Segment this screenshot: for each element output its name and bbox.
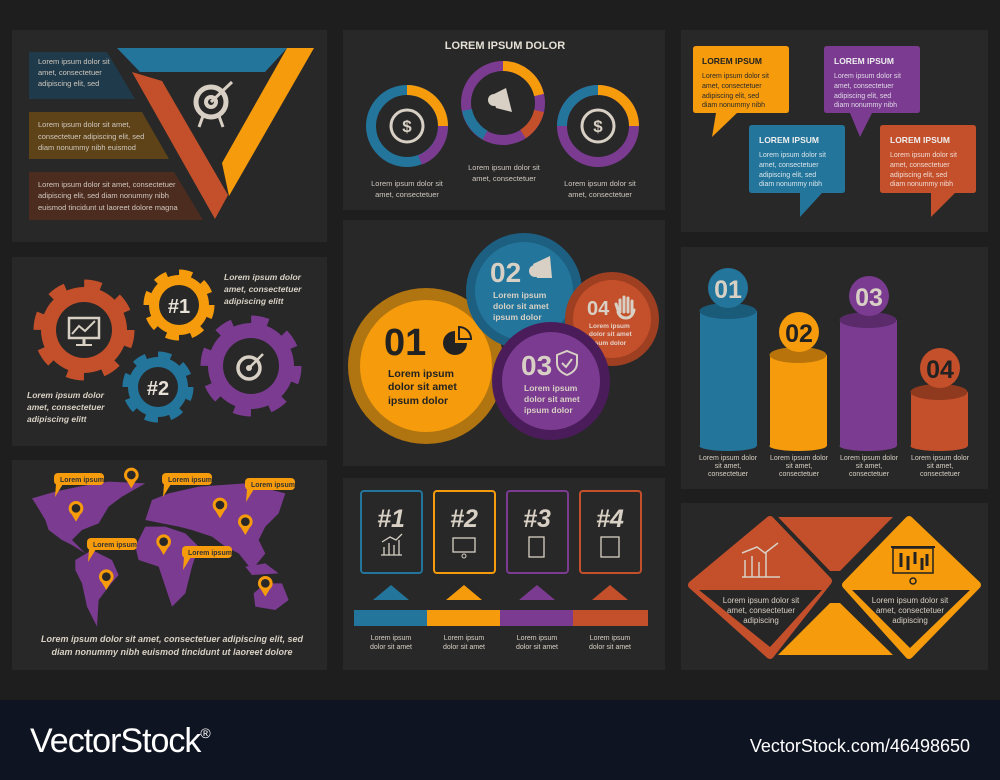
gear purple (205, 320, 297, 412)
step labels: dolor sit amet (370, 644, 412, 651)
cylinder 02: 02 (785, 320, 813, 348)
bar (354, 610, 648, 626)
cylinder 03: Lorem ipsum dolor (840, 455, 899, 462)
step labels: dolor sit amet (443, 644, 485, 651)
step 4: #4 (596, 505, 624, 533)
diamond orange: Lorem ipsum dolor sit (872, 596, 949, 605)
donut left: $ (402, 117, 412, 136)
gear #2 blue (126, 355, 190, 419)
panel: gears (12, 257, 327, 446)
bottom triangle (778, 603, 893, 655)
circle 03: 03 (521, 350, 552, 381)
text box 3: euismod tincidunt ut laoreet dolore magna (38, 203, 178, 212)
circle 02: 02 (490, 257, 521, 288)
circle 02: ipsum dolor (493, 312, 542, 322)
diamond red: amet, consectetuer (727, 606, 795, 615)
step labels: Lorem ipsum (371, 635, 411, 642)
cylinder 01: sit amet, (715, 463, 741, 470)
cylinder 03 (840, 276, 899, 478)
circle 03: Lorem ipsum (524, 383, 578, 393)
donut middle: amet, consectetuer (472, 174, 536, 183)
text box 1: adipiscing elit, sed (38, 79, 99, 88)
triangle bands (117, 48, 314, 219)
panel: cylinders (681, 247, 988, 489)
step labels: dolor sit amet (516, 644, 558, 651)
cylinder 04: 04 (926, 356, 954, 384)
circle 04: ipsum dolor (589, 340, 627, 347)
gear red (38, 284, 130, 376)
bubble blue: adipiscing elit, sed (759, 172, 816, 179)
text box 3: adipiscing elit, sed diam nonummy nibh (38, 191, 169, 200)
footer banner (0, 700, 1000, 780)
text box 2 (29, 112, 169, 159)
step 1: #1 (377, 505, 405, 533)
donut left (371, 90, 444, 199)
step 3 (507, 491, 568, 600)
map labels: Lorem ipsum (93, 542, 137, 549)
circle 01 (348, 288, 504, 444)
map labels: Lorem ipsum (251, 482, 295, 489)
icon: target (196, 82, 232, 127)
bubble blue: amet, consectetuer (759, 162, 819, 169)
text box 1: amet, consectetuer (38, 68, 102, 77)
cylinder 01: 01 (714, 276, 742, 304)
text box 1: Lorem ipsum dolor sit (38, 57, 111, 66)
map caption: Lorem ipsum dolor sit amet, consectetuer adipiscing elit, sed (41, 634, 304, 644)
gear #1 orange: #1 (168, 296, 190, 318)
circle 02: Lorem ipsum (493, 290, 547, 300)
circle 01: 01 (384, 322, 426, 364)
step 4 (580, 491, 641, 600)
cylinder 03: sit amet, (856, 463, 882, 470)
text left: Lorem ipsum dolor (27, 390, 105, 400)
cylinder 01 (699, 268, 758, 478)
cylinder 04: sit amet, (927, 463, 953, 470)
text box 3 (29, 172, 203, 220)
step labels: Lorem ipsum (517, 635, 557, 642)
map continents (32, 482, 289, 627)
donut left: Lorem ipsum dolor sit (371, 179, 444, 188)
map caption: diam nonummy nibh euismod tincidunt ut laoreet dolore (51, 647, 293, 657)
bubble orange: diam nonummy nibh (702, 102, 765, 109)
circle 03: dolor sit amet (524, 394, 580, 404)
cylinder 01: Lorem ipsum dolor (699, 455, 758, 462)
bubble red: diam nonummy nibh (890, 181, 953, 188)
donut middle (466, 66, 541, 183)
bubble purple: amet, consectetuer (834, 83, 894, 90)
map pins (69, 468, 273, 597)
cylinder 02: sit amet, (786, 463, 812, 470)
cylinder 04: Lorem ipsum dolor (911, 455, 970, 462)
panel: speech bubbles (681, 30, 988, 232)
bubble orange (693, 46, 789, 137)
footer banner: VectorStock.com/46498650 (750, 736, 970, 756)
circle 04: Lorem ipsum (589, 323, 630, 330)
donut right: Lorem ipsum dolor sit (564, 179, 637, 188)
cylinder 01: consectetuer (708, 471, 749, 478)
cylinder 02: consectetuer (779, 471, 820, 478)
cylinder 02 (770, 312, 829, 478)
diamond red: adipiscing (743, 616, 779, 625)
bubble orange: LOREM IPSUM (702, 56, 762, 66)
top triangle (778, 517, 893, 571)
bubble red: amet, consectetuer (890, 162, 950, 169)
map labels: Lorem ipsum (168, 477, 212, 484)
donut left: amet, consectetuer (375, 190, 439, 199)
bubble purple: LOREM IPSUM (834, 56, 894, 66)
bubble purple (824, 46, 920, 137)
text left: adipiscing elitt (27, 414, 88, 424)
bubble red: adipiscing elit, sed (890, 172, 947, 179)
text left: amet, consectetuer (27, 402, 105, 412)
panel: triangle (12, 30, 327, 242)
circle 02 (466, 233, 582, 349)
gear #1 orange (147, 273, 211, 337)
text box 2: Lorem ipsum dolor sit amet, (38, 120, 131, 129)
bubble orange: Lorem ipsum dolor sit (702, 73, 769, 80)
step labels: Lorem ipsum (444, 635, 484, 642)
diamond red (692, 520, 828, 655)
text box 3: Lorem ipsum dolor sit amet, consectetuer (38, 180, 176, 189)
text box 2: diam nonummy nibh euismod (38, 143, 136, 152)
diamond orange (846, 520, 977, 655)
bubble blue: Lorem ipsum dolor sit (759, 152, 826, 159)
diamond orange: adipiscing (892, 616, 928, 625)
map labels: Lorem ipsum (188, 550, 232, 557)
panel: world map (12, 460, 327, 670)
map labels (54, 473, 295, 570)
panel: steps (343, 478, 665, 670)
cylinder 02: Lorem ipsum dolor (770, 455, 829, 462)
text right: amet, consectetuer (224, 284, 302, 294)
step 1 (361, 491, 422, 600)
donut middle: Lorem ipsum dolor sit (468, 163, 541, 172)
circle 01: Lorem ipsum (388, 368, 454, 380)
text right: Lorem ipsum dolor (224, 272, 302, 282)
bubble orange: amet, consectetuer (702, 83, 762, 90)
bubble red: Lorem ipsum dolor sit (890, 152, 957, 159)
panel: diamonds (681, 503, 988, 670)
diamond orange: amet, consectetuer (876, 606, 944, 615)
text right: adipiscing elitt (224, 296, 285, 306)
bubble purple: adipiscing elit, sed (834, 93, 891, 100)
circle 01: dolor sit amet (388, 381, 457, 393)
bubble blue (749, 125, 845, 217)
panel: circles (343, 220, 665, 466)
step 2: #2 (450, 505, 478, 533)
gear #2 blue: #2 (147, 378, 169, 400)
donut right: amet, consectetuer (568, 190, 632, 199)
bubble orange: adipiscing elit, sed (702, 93, 759, 100)
heading: LOREM IPSUM DOLOR (445, 40, 565, 52)
bubble purple: diam nonummy nibh (834, 102, 897, 109)
footer banner: VectorStock (30, 722, 200, 760)
map labels: Lorem ipsum (60, 477, 104, 484)
cylinder 03: consectetuer (849, 471, 890, 478)
diamond red: Lorem ipsum dolor sit (723, 596, 800, 605)
footer banner: ® (200, 725, 211, 741)
text box 2: consectetuer adipiscing elit, sed (38, 132, 144, 141)
cylinder 03: 03 (855, 284, 883, 312)
bubble red: LOREM IPSUM (890, 135, 950, 145)
donut right (562, 90, 637, 199)
circle 04: dolor sit amet (589, 331, 632, 338)
circle 02: dolor sit amet (493, 301, 549, 311)
bubble purple: Lorem ipsum dolor sit (834, 73, 901, 80)
donut right: $ (593, 117, 603, 136)
circle 03: ipsum dolor (524, 405, 573, 415)
bubble blue: diam nonummy nibh (759, 181, 822, 188)
circle 01: ipsum dolor (388, 395, 448, 407)
circle 04: 04 (587, 298, 610, 320)
cylinder 04: consectetuer (920, 471, 961, 478)
step labels: dolor sit amet (589, 644, 631, 651)
circle 04 (565, 272, 659, 366)
step 3: #3 (523, 505, 551, 533)
panel: donuts (343, 30, 665, 210)
bubble blue: LOREM IPSUM (759, 135, 819, 145)
bubble red (880, 125, 976, 217)
cylinder 04 (910, 348, 970, 478)
step labels: Lorem ipsum (590, 635, 630, 642)
step 2 (434, 491, 495, 600)
circle 03 (492, 322, 610, 440)
text box 1 (29, 52, 135, 99)
